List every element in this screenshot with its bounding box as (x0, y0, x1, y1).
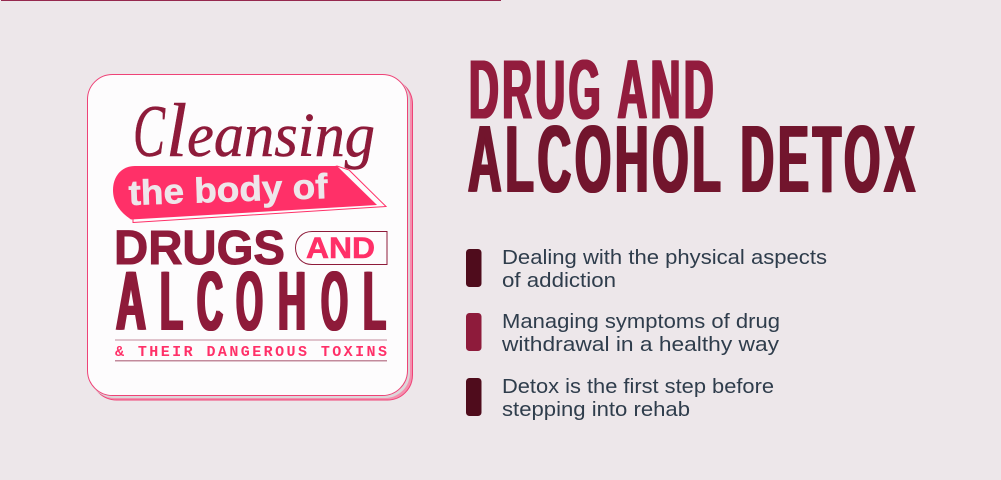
text: ALCOHOL: C (197, 254, 223, 348)
script heading: Cleansing: eansing (187, 102, 375, 170)
bullet 3: stepping into rehab (502, 398, 690, 421)
bullet 2 (466, 310, 780, 356)
panel: cleansing card: L (363, 254, 386, 348)
bullet list (466, 246, 827, 421)
text: ALCOHOL: L (160, 254, 183, 348)
main title: DRUG AND (469, 42, 717, 136)
bullet 2: withdrawal in a healthy way (501, 333, 780, 356)
main title (468, 42, 919, 213)
ribbon: the body of: the body of (128, 167, 329, 213)
text: ALCOHOL: H (278, 254, 306, 348)
badge: AND (296, 232, 387, 265)
bullet 3 (466, 375, 774, 421)
text: ALCOHOL: O (236, 254, 263, 348)
text: DRUGS: DRUGS (114, 222, 285, 275)
bullet 2: Managing symptoms of drug (502, 310, 780, 333)
tagline: and their dangerous toxins: & THEIR DANGEROUS TOXINS (115, 344, 387, 361)
text: ALCOHOL: O (321, 254, 348, 348)
text: ALCOHOL (116, 254, 386, 348)
bullet 1: Dealing with the physical aspects (502, 246, 827, 269)
script heading: Cleansing (133, 89, 375, 173)
script heading: Cleansing: l (166, 89, 187, 173)
bullet 1 (466, 246, 827, 292)
badge: AND: AND (306, 232, 375, 265)
panel: cleansing card (88, 74, 412, 400)
ribbon: the body of (113, 166, 386, 222)
bullet 1: of addiction (502, 269, 616, 292)
bullet 3: Detox is the first step before (502, 375, 774, 398)
text: ALCOHOL: A (116, 254, 146, 348)
script heading: Cleansing: C (133, 91, 166, 173)
